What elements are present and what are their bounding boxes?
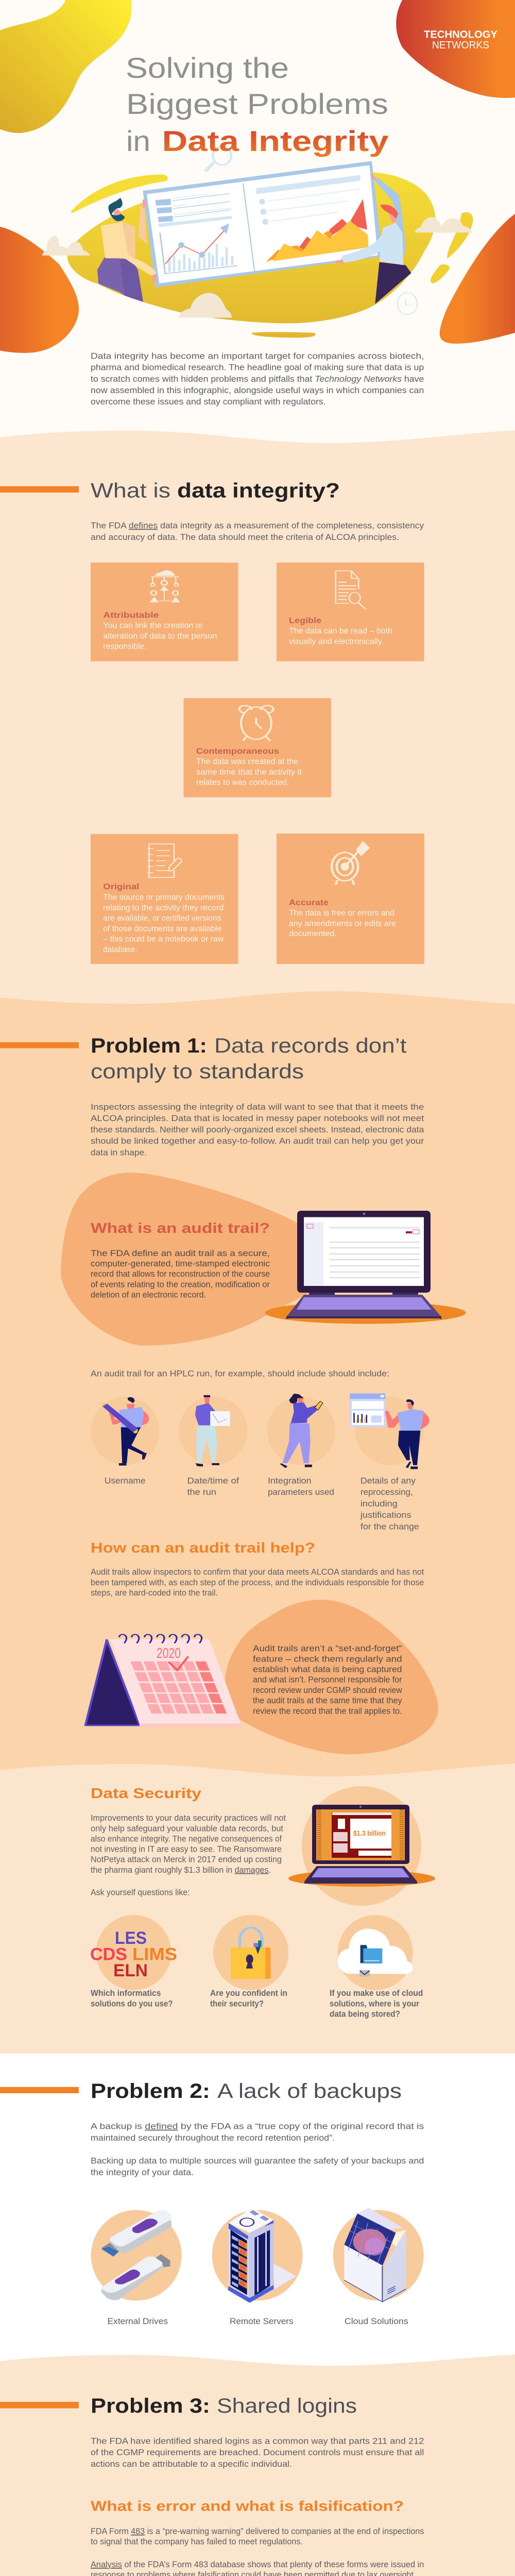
card: Legible: visually and electronically. [289, 637, 384, 646]
title: Data Integrity [162, 125, 388, 157]
card: Accurate: Accurate [289, 899, 329, 907]
audit trail help paragraph: been tampered with, as each step of the process, and the individuals responsible for those [91, 1578, 424, 1587]
card: Original: are available, or certified versions [103, 914, 221, 923]
hero illustration and blobs [0, 0, 515, 353]
icon: target with arrow [332, 841, 369, 885]
data security paragraph: Ask yourself questions like: [91, 1888, 190, 1897]
panel: audit trail blob [61, 1173, 320, 1346]
person: username with pencil [102, 1397, 149, 1466]
FDA definition text: and accuracy of data. The data should meet the criteria of ALCOA principles. [91, 532, 399, 542]
laptop: ransomware screen [288, 1786, 435, 1906]
card: Contemporaneous: Contemporaneous [196, 747, 279, 756]
audit trail definition: computer-generated, time-stamped electronic [91, 1259, 270, 1268]
logo: Technology Networks: TECHNOLOGY [424, 29, 498, 40]
intro paragraph: Data integrity has become an important target for companies across biotech, [91, 351, 424, 361]
card: Original: – this could be a notebook or raw [103, 935, 224, 944]
heading: Problem 2: Problem 2: [91, 2080, 210, 2103]
clouds [42, 217, 472, 317]
icon: padlock [231, 1928, 271, 1979]
card: Accurate: The data is free or errors and [289, 909, 394, 918]
LES CDS LIMS ELN wordmark: LIMS [132, 1945, 177, 1964]
person: left holding board [97, 198, 157, 302]
background: data security section [0, 1764, 515, 2056]
question: cloud storage: solutions, where is your [330, 1998, 419, 2008]
icon: cloud solutions [333, 2208, 424, 2302]
labels under people: parameters used [268, 1487, 334, 1497]
heading: Problem 3: Shared logins [217, 2395, 357, 2417]
labels under people: the run [187, 1487, 216, 1497]
FDA definition text [91, 521, 424, 542]
Problem 1 paragraph: data in shape. [91, 1147, 147, 1157]
question: cloud storage [330, 1915, 423, 2019]
labels: backup options [107, 2316, 408, 2326]
logo: Technology Networks [424, 29, 498, 51]
intro paragraph: to scratch comes with hidden problems and pitfalls that Technology Networks have [91, 374, 424, 384]
title: Biggest Problems [126, 88, 388, 120]
backup paragraph: the integrity of your data. [91, 2167, 194, 2177]
blob: orange bottom right [440, 214, 515, 344]
card: Original: relating to the activity they record [103, 904, 224, 912]
title: Solving the [126, 52, 289, 84]
intro paragraph: pharma and biomedical research. The headline goal of making sure that data is up [91, 363, 424, 372]
card: Contemporaneous: same time that the activity it [196, 768, 302, 777]
labels: backup options: External Drives [107, 2316, 168, 2326]
person: date and time with tablet [195, 1395, 230, 1467]
question: cloud storage: If you make use of cloud [330, 1988, 423, 1998]
heading: How can an audit trail help?: How can an audit trail help? [91, 1539, 315, 1555]
question: security confidence: their security? [210, 1998, 264, 2008]
background: problem 1 section [0, 991, 515, 1783]
heading: What is an audit trail?: What is an audit trail? [91, 1220, 270, 1236]
board [143, 161, 383, 287]
data security paragraph: the pharma giant roughly $1.3 billion in damages. [91, 1865, 271, 1875]
card: Contemporaneous: relates to was conducted. [196, 778, 289, 787]
card: Contemporaneous: The data was created at the [196, 757, 298, 766]
card: Legible: Legible [289, 616, 321, 625]
card: Original: database. [103, 945, 138, 954]
question: informatics solutions: solutions do you use? [91, 1998, 173, 2008]
swoosh: yellow upper left [71, 175, 168, 213]
backup paragraph: A backup is defined by the FDA as a “true copy of the original record that is [91, 2122, 424, 2131]
laptop: audit trail software [265, 1211, 466, 1324]
heading: Problem 2 [0, 2080, 402, 2103]
shared logins paragraph: of the CGMP requirements are breached. Document controls must ensure that all [91, 2448, 424, 2458]
intro paragraph [91, 351, 424, 406]
audit trail definition: The FDA define an audit trail as a secure, [91, 1248, 270, 1258]
intro paragraph: overcome these issues and stay compliant with regulators. [91, 397, 326, 406]
heading: Problem 1 [0, 1035, 407, 1083]
card: Original: The source or primary documents [103, 893, 225, 902]
icon: 2020 calendar [85, 1634, 241, 1726]
blob: orange bottom left [0, 227, 79, 353]
card: Attributable: responsible. [103, 642, 146, 651]
icon: cloud with folder [338, 1928, 413, 1976]
title [126, 52, 388, 157]
LES CDS LIMS ELN wordmark [90, 1928, 177, 1980]
intro paragraph: now assembled in this infographic, alongside useful ways in which companies can [91, 385, 424, 395]
people row [91, 1394, 430, 1469]
set-and-forget text: Audit trails aren’t a “set-and-forget” [253, 1643, 402, 1653]
Form 483 paragraphs: to signal that the company has failed to meet regulations. [91, 2537, 303, 2546]
data security paragraph [91, 1813, 286, 1897]
labels under people: Details of any [360, 1476, 416, 1486]
Form 483 paragraphs [91, 2527, 424, 2576]
blob: large yellow behind board [67, 173, 435, 324]
Problem 1 paragraph: these standards. Neither will poorly-organized excel sheets. Instead, electronic data [91, 1125, 424, 1134]
title: in [126, 125, 150, 157]
labels under people [105, 1476, 419, 1531]
audit trail definition: of events relating to the creation, modification or [91, 1280, 270, 1290]
audit trail definition: record that allows for reconstruction of the course [91, 1269, 270, 1279]
backup paragraph: Backing up data to multiple sources will guarantee the safety of your backups and [91, 2156, 424, 2165]
blob: orange top right [396, 0, 515, 98]
laptop: ransomware screen: $1.3 billion [353, 1829, 386, 1837]
labels under people: Username [105, 1476, 145, 1486]
labels under people: justifications [360, 1510, 411, 1520]
card: Attributable: Attributable [103, 611, 159, 620]
data security paragraph: Improvements to your data security practices will not [91, 1813, 286, 1823]
set-and-forget text: establish what data is being captured [253, 1664, 402, 1674]
set-and-forget text: review the record that the trail applies to. [253, 1706, 402, 1716]
heading: Problem 1: Problem 1: [91, 1035, 207, 1057]
HPLC intro sentence: An audit trail for an HPLC run, for example, should include should include: [91, 1369, 389, 1379]
heading: What is data integrity? [0, 479, 340, 502]
question: informatics solutions [90, 1915, 177, 2008]
question: cloud storage: data being stored? [330, 2009, 400, 2019]
card: Attributable: You can link the creation or [103, 621, 203, 630]
heading: Problem 2: A lack of backups [217, 2080, 402, 2103]
person: right holding board [335, 173, 411, 304]
card: Accurate [277, 834, 424, 964]
card: Original: Original [103, 883, 139, 891]
heading: Problem 3 [0, 2395, 357, 2417]
background: what is data integrity section [0, 430, 515, 1010]
question: informatics solutions: Which informatics [91, 1988, 161, 1998]
card: Accurate: any amendments or edits are [289, 919, 396, 928]
shared logins paragraph [91, 2436, 424, 2469]
panel: set-and-forget blob [225, 1600, 438, 1754]
heading: What is error and what is falsification?: What is error and what is falsification? [91, 2498, 404, 2514]
card: Legible: The data can be read – both [289, 626, 392, 636]
logo: Technology Networks: NETWORKS [432, 40, 489, 51]
yellow bar under hero [251, 332, 315, 337]
icon: 2020 calendar: 2020 [157, 1645, 181, 1661]
audit trail help paragraph [91, 1567, 424, 1598]
backup paragraph: maintained securely throughout the record retention period”. [91, 2133, 335, 2143]
background: problem 2 section [0, 2054, 515, 2373]
icon: clock [398, 293, 417, 315]
icon: magnifying glass [205, 146, 231, 172]
person: integration parameters with tablet [280, 1394, 323, 1468]
set-and-forget text: the audit trails at the same time that they [253, 1696, 402, 1705]
shared logins paragraph: The FDA have identified shared logins as a common way that parts 211 and 212 [91, 2436, 424, 2446]
heading: Problem 3: Problem 3: [91, 2395, 210, 2417]
data security paragraph: only help safeguard your valuable data records, but [91, 1824, 283, 1833]
card: Legible [277, 563, 424, 661]
labels: backup options: Cloud Solutions [345, 2316, 408, 2326]
Problem 1 paragraph [91, 1102, 424, 1157]
question: security confidence [210, 1915, 288, 2008]
question: security confidence: Are you confident in [210, 1988, 287, 1998]
heading: Data Security: Data Security [91, 1785, 202, 1801]
data security paragraph: also enhance integrity. The negative consequences of [91, 1834, 282, 1843]
Problem 1 paragraph: ALCOA principles. Data that is located in messy paper notebooks will not meet [91, 1113, 424, 1123]
FDA definition text: The FDA defines data integrity as a measurement of the completeness, consistency [91, 521, 424, 531]
person: details of reprocessing with report [350, 1394, 430, 1469]
labels under people: for the change [360, 1521, 419, 1531]
card: Original: of those documents are available [103, 925, 221, 934]
card: Attributable [91, 563, 238, 661]
card: Attributable: alteration of data to the person [103, 632, 217, 640]
labels under people: Integration [268, 1476, 312, 1486]
set-and-forget text: feature – check them regularly and [253, 1654, 402, 1664]
card: Accurate: documented. [289, 929, 337, 938]
LES CDS LIMS ELN wordmark: CDS [90, 1945, 127, 1964]
data security paragraph: NotPetya attack on Merck in 2017 ended up costing [91, 1855, 282, 1864]
audit trail help paragraph: steps, are hard-coded into the trail. [91, 1588, 218, 1598]
labels under people: Date/time of [187, 1476, 239, 1486]
backup paragraph [91, 2122, 424, 2177]
Problem 1 paragraph: should be linked together and easy-to-follow. An audit trail can help you get your [91, 1136, 424, 1146]
blob: yellow top left [0, 0, 132, 133]
labels under people: reprocessing, [360, 1487, 413, 1497]
swoosh: yellow right [431, 212, 473, 283]
Problem 1 paragraph: Inspectors assessing the integrity of data will want to see that that it meets the [91, 1102, 424, 1112]
LES CDS LIMS ELN wordmark: LES [115, 1928, 147, 1948]
icon: people network [150, 571, 180, 602]
labels under people: including [360, 1499, 398, 1509]
LES CDS LIMS ELN wordmark: ELN [113, 1961, 148, 1980]
data security paragraph: not investing in IT are easy to see. The Ransomware [91, 1844, 282, 1854]
set-and-forget text: record review under CGMP should review [253, 1685, 402, 1695]
icon: remote servers [212, 2208, 303, 2303]
icon: alarm clock [239, 706, 273, 741]
Form 483 paragraphs: Analysis of the FDA’s Form 483 database shows that plenty of these forms were issued in [91, 2560, 424, 2569]
heading: What is data integrity?: What is [91, 479, 170, 502]
labels: backup options: Remote Servers [230, 2316, 294, 2326]
audit trail help paragraph: Audit trails allow inspectors to confirm that your data meets ALCOA standards and has not [91, 1567, 424, 1577]
Form 483 paragraphs: FDA Form 483 is a “pre-warning warning” delivered to companies at the end of inspections [91, 2527, 424, 2536]
set-and-forget text [253, 1643, 402, 1716]
heading: What is data integrity?: data integrity? [177, 479, 340, 502]
heading: Problem 1: Data records don’t [214, 1035, 407, 1057]
set-and-forget text: and what isn’t. Personnel responsible for [253, 1675, 402, 1685]
shared logins paragraph: actions can be attributable to a specific individual. [91, 2459, 292, 2469]
audit trail definition: deletion of an electronic record. [91, 1290, 206, 1300]
heading: Problem 1: comply to standards [91, 1060, 304, 1083]
icon: document with magnifier [336, 571, 366, 609]
audit trail definition [91, 1248, 270, 1300]
card: Original [91, 834, 238, 964]
icon: notepad and pencil [147, 844, 181, 877]
card: Contemporaneous [183, 698, 331, 798]
background: problem 3 section [0, 2354, 515, 2576]
icon: external drives [91, 2210, 182, 2301]
